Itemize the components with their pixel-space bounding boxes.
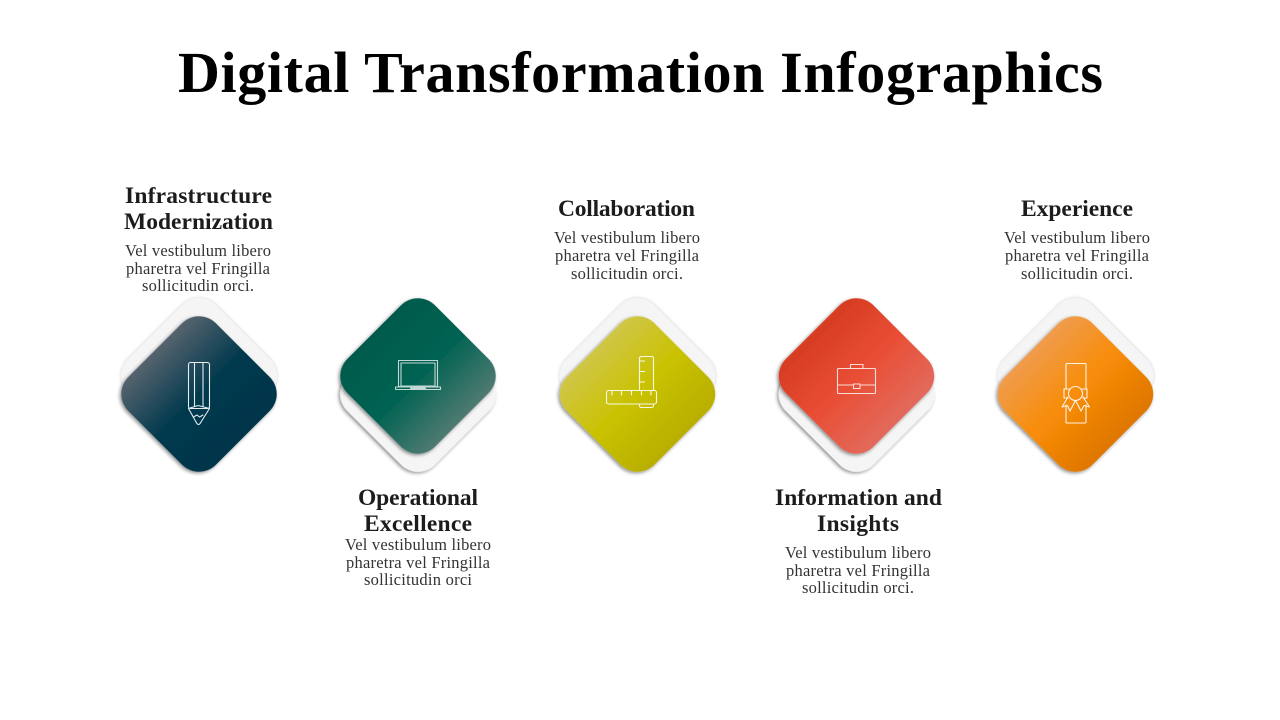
text block: operational description xyxy=(345,535,491,589)
front diamond xyxy=(111,306,287,482)
text block: collaboration description xyxy=(554,228,700,283)
heading: infrastructure modernization xyxy=(124,183,273,235)
panel: collaboration xyxy=(550,196,725,482)
panel: experience xyxy=(988,196,1163,482)
front diamond xyxy=(988,306,1163,482)
heading: infrastructure modernization: Infrastructure xyxy=(125,183,272,209)
icon: rulers xyxy=(606,356,656,408)
text block: information description: sollicitudin orci. xyxy=(802,578,914,597)
title: Digital Transformation Infographics xyxy=(178,40,1103,105)
text block: experience description: Vel vestibulum libero xyxy=(1004,228,1150,247)
text block: experience description xyxy=(1004,228,1150,283)
icon: laptop xyxy=(396,360,440,390)
icon: briefcase xyxy=(838,364,876,394)
text block: information description: Vel vestibulum libero xyxy=(785,543,931,562)
heading: infrastructure modernization: Modernization xyxy=(124,209,273,235)
back diamond xyxy=(330,306,506,482)
heading: collaboration: Collaboration xyxy=(558,196,695,222)
front diamond xyxy=(550,306,725,482)
text block: collaboration description: Vel vestibulum libero xyxy=(554,228,700,247)
text block: information description xyxy=(785,543,931,597)
heading: information and insights: Insights xyxy=(817,511,899,537)
panel: information and insights xyxy=(769,288,944,597)
back diamond xyxy=(550,288,725,464)
heading: information and insights: Information and xyxy=(775,485,942,511)
front diamond xyxy=(330,288,506,464)
heading: operational excellence: Operational xyxy=(358,485,478,511)
icon: pencil xyxy=(188,362,210,424)
heading: operational excellence: Excellence xyxy=(364,511,472,537)
panel: infrastructure modernization xyxy=(111,183,287,482)
text block: operational description: Vel vestibulum libero xyxy=(345,535,491,554)
text block: infrastructure description: sollicitudin orci. xyxy=(142,276,254,295)
text block: collaboration description: sollicitudin orci. xyxy=(571,264,683,283)
text block: information description: pharetra vel Fringilla xyxy=(786,561,931,580)
heading: operational excellence xyxy=(358,485,478,537)
icon: award certificate xyxy=(1062,364,1090,423)
text block: experience description: sollicitudin orci. xyxy=(1021,264,1133,283)
heading: experience: Experience xyxy=(1021,196,1133,222)
back diamond xyxy=(769,306,944,482)
front diamond xyxy=(769,288,944,464)
text block: experience description: pharetra vel Fringilla xyxy=(1005,246,1150,265)
heading: information and insights xyxy=(775,485,942,537)
back diamond xyxy=(988,288,1163,464)
text block: collaboration description: pharetra vel Fringilla xyxy=(555,246,700,265)
panel: operational excellence xyxy=(330,288,506,589)
text block: infrastructure description: Vel vestibulum libero xyxy=(125,241,271,260)
text block: operational description: sollicitudin orci xyxy=(364,570,472,589)
text block: infrastructure description: pharetra vel Fringilla xyxy=(126,259,271,278)
text block: infrastructure description xyxy=(125,241,271,295)
back diamond xyxy=(111,288,287,464)
text block: operational description: pharetra vel Fringilla xyxy=(346,553,491,572)
